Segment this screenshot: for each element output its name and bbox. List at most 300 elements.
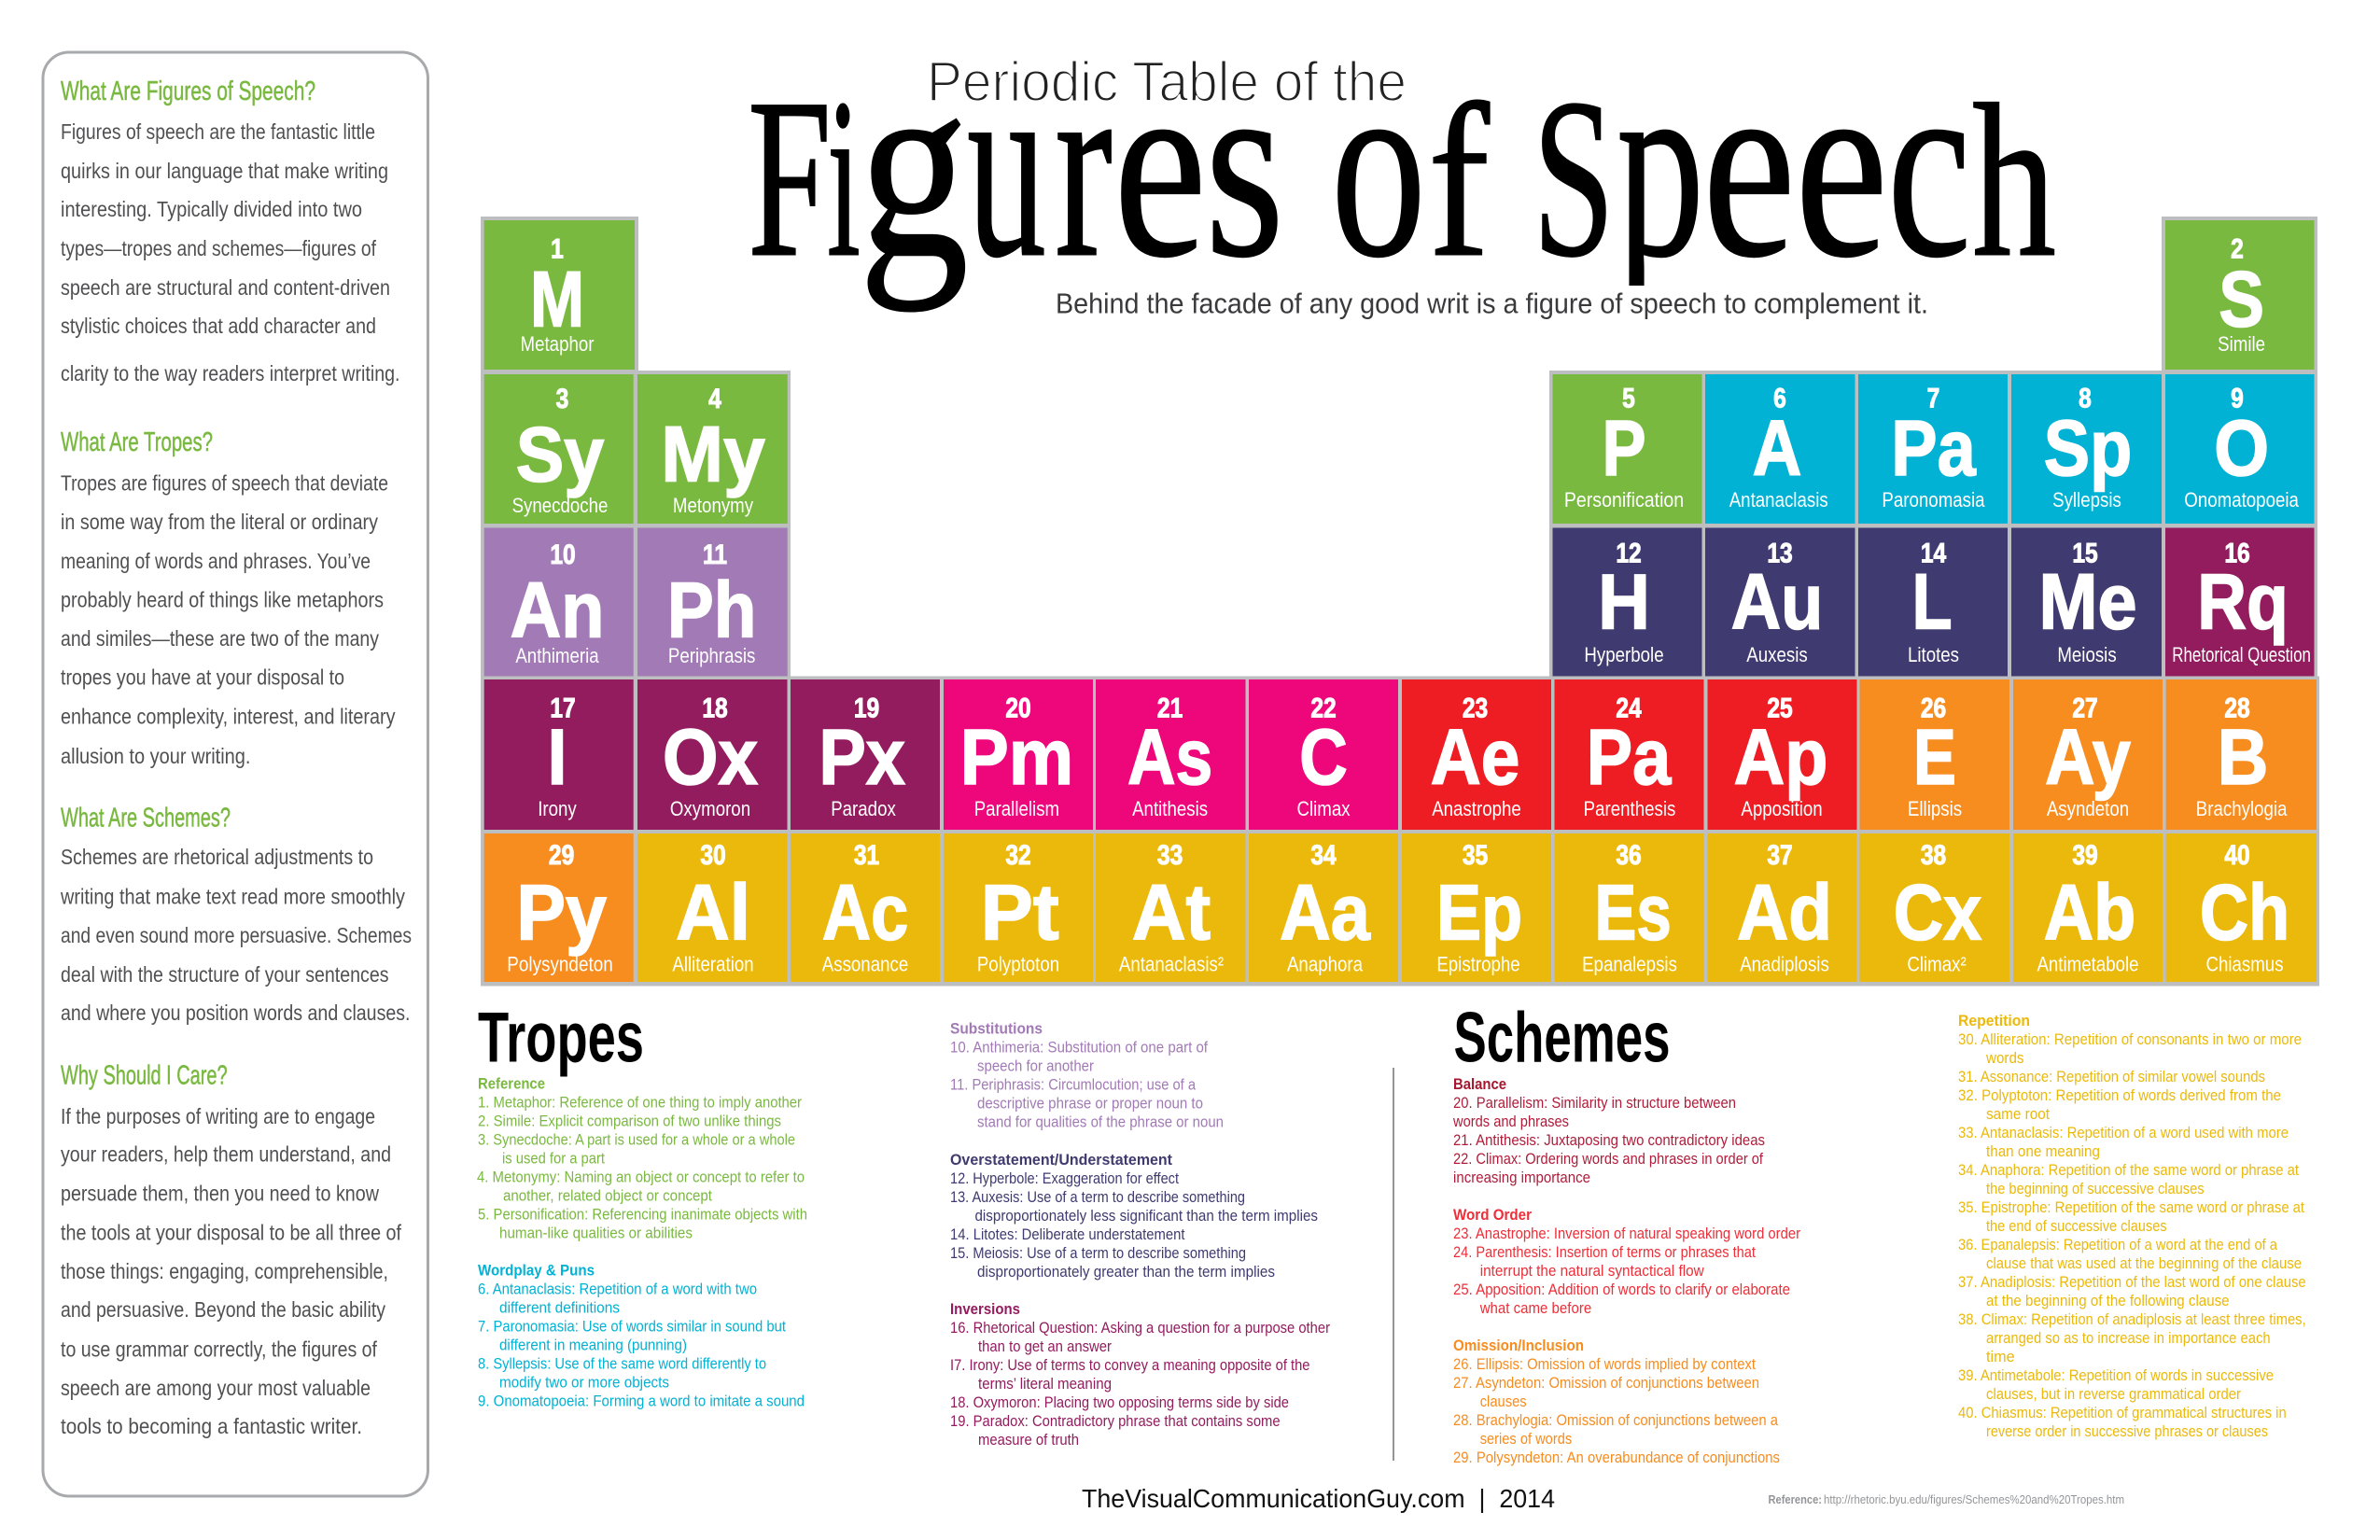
text block: tropes: probably heard of things like metaphors [61, 588, 384, 612]
legend: repetition [1958, 1013, 2306, 1440]
tile 20 Parallelism [944, 679, 1093, 830]
legend: word order: Word Order [1453, 1207, 1533, 1224]
legend: repetition: the beginning of successive clauses [1986, 1181, 2205, 1197]
tile 2 Simile [2165, 220, 2315, 370]
tile 38 Climax squared: Cx [1894, 868, 1981, 957]
tile 10 Anthimeria: An [511, 567, 604, 654]
tile 3 Synecdoche: Synecdoche [512, 496, 608, 517]
tile 2 Simile: S [2219, 256, 2264, 343]
legend: word order: 25. Apposition: Addition of words to clarify or elaborate [1453, 1281, 1790, 1298]
tile 34 Anaphora: 34 [1310, 839, 1337, 871]
title: Figures of Speech: u [967, 21, 1046, 313]
tile 8 Syllepsis [2011, 374, 2162, 524]
legend: wordplay and puns: different definitions [499, 1300, 620, 1317]
title: Figures of Speech: h [1972, 60, 2056, 302]
tile 19 Paradox [791, 679, 940, 830]
legend: overstatement and understatement: disproportionately less significant than the term implies [974, 1208, 1318, 1225]
tile 6 Antanaclasis: Antanaclasis [1729, 490, 1828, 511]
legend: omission and inclusion: 26. Ellipsis: Omission of words implied by context [1453, 1356, 1756, 1373]
tile 4 Metonymy [637, 374, 788, 524]
tile 39 Antimetabole: Ab [2044, 868, 2135, 957]
tile 21 Antithesis: As [1127, 712, 1212, 801]
tile 9 Onomatopoeia: 9 [2231, 382, 2244, 413]
tile 21 Antithesis: Antithesis [1132, 799, 1208, 820]
legend: balance [1452, 1076, 1765, 1186]
tile 32 Polyptoton: Polyptoton [977, 954, 1059, 976]
text block: tropes: allusion to your writing. [61, 744, 250, 768]
legend: overstatement and understatement: 12. Hyperbole: Exaggeration for effect [950, 1170, 1179, 1187]
text block: figures of speech: interesting. Typically divided into two [61, 197, 362, 221]
tile 33 Antanaclasis squared: At [1132, 870, 1211, 957]
tile 11 Periphrasis: Ph [667, 567, 756, 654]
text block: figures of speech: types—tropes and schemes—figures of [61, 236, 377, 260]
tile 3 Synecdoche: Sy [516, 412, 604, 498]
tile 1 Metaphor [484, 220, 635, 370]
text block: why care: and persuasive. Beyond the basic ability [61, 1297, 385, 1322]
tile 29 Polysyndeton: Py [516, 869, 607, 957]
title: Periodic Table of the: Periodic Table of the [927, 50, 1407, 113]
tile 23 Anastrophe: Ae [1431, 713, 1519, 801]
tile 3 Synecdoche: 3 [556, 383, 568, 414]
legend: reference tropes: is used for a part [502, 1151, 605, 1168]
legend: reference tropes: 3. Synecdoche: A part is used for a whole or a whole [478, 1132, 795, 1149]
text block: tropes [61, 470, 396, 768]
legend: repetition: 36. Epanalepsis: Repetition of a word at the end of a [1958, 1237, 2278, 1253]
legend: repetition: the end of successive clauses [1986, 1218, 2167, 1235]
tile 18 Oxymoron [637, 679, 788, 830]
tile 34 Anaphora [1249, 833, 1398, 982]
tile 30 Alliteration [637, 833, 788, 982]
legend: repetition: 37. Anadiplosis: Repetition of the last word of one clause [1958, 1274, 2306, 1291]
tile 15 Meiosis: Me [2038, 558, 2137, 646]
tile 13 Auxesis [1705, 528, 1855, 676]
heading: what are schemes: What Are Schemes? [61, 804, 231, 833]
legend: inversions: 16. Rhetorical Question: Asking a question for a purpose other [950, 1320, 1330, 1337]
tile 13 Auxesis: 13 [1767, 537, 1793, 568]
legend: repetition: clause that was used at the beginning of the clause [1986, 1255, 2302, 1272]
legend: overstatement and understatement: 14. Litotes: Deliberate understatement [950, 1226, 1185, 1243]
legend: substitutions: speech for another [977, 1057, 1094, 1074]
tile 28 Brachylogia: B [2218, 713, 2268, 801]
title: Figures of Speech: S [1533, 52, 1615, 304]
text block: why care: those things: engaging, comprehensible, [61, 1259, 388, 1283]
tile 16 Rhetorical Question [2165, 528, 2315, 676]
tile 15 Meiosis: 15 [2072, 537, 2098, 568]
periodic table [481, 217, 2319, 986]
tile 39 Antimetabole: Antimetabole [2037, 954, 2139, 976]
tile 24 Parenthesis [1555, 679, 1704, 830]
text block: figures of speech: stylistic choices that add character and [61, 314, 376, 338]
legend: inversions: terms’ literal meaning [978, 1376, 1112, 1393]
tile 18 Oxymoron: 18 [702, 692, 728, 723]
tile 7 Paronomasia: 7 [1927, 382, 1939, 413]
title: Figures of Speech: c [1887, 21, 1971, 313]
legend: omission and inclusion: Omission/Inclusion [1453, 1337, 1584, 1354]
tile 14 Litotes: L [1911, 559, 1953, 646]
tile 12 Hyperbole: Hyperbole [1584, 645, 1664, 666]
tile 37 Anadiplosis: Ad [1737, 869, 1832, 958]
tile 5 Personification: P [1602, 405, 1646, 492]
legend: repetition: 30. Alliteration: Repetition of consonants in two or more [1958, 1031, 2302, 1048]
text block: why care [61, 1104, 402, 1438]
text block: why care: tools to becoming a fantastic writer. [61, 1414, 362, 1438]
tile 12 Hyperbole: 12 [1616, 537, 1642, 568]
legend: omission and inclusion: 28. Brachylogia: Omission of conjunctions between a [1453, 1412, 1779, 1429]
tile 36 Epanalepsis [1555, 833, 1704, 982]
text block: schemes: writing that make text read more smoothly [60, 885, 405, 909]
legend: reference tropes: human-like qualities or abilities [499, 1225, 693, 1242]
legend: repetition: 38. Climax: Repetition of anadiplosis at least three times, [1958, 1311, 2306, 1328]
text block: tropes: meaning of words and phrases. You’ve [61, 549, 371, 573]
legend: repetition: arranged so as to increase in importance each [1986, 1330, 2271, 1347]
tile 8 Syllepsis: 8 [2079, 382, 2092, 413]
tile 35 Epistrophe [1402, 833, 1551, 982]
legend: substitutions: stand for qualities of the phrase or noun [977, 1113, 1224, 1130]
tile 35 Epistrophe: 35 [1463, 839, 1488, 871]
legend: overstatement and understatement: disproportionately greater than the term implies [977, 1264, 1275, 1281]
text block: schemes: Schemes are rhetorical adjustments to [61, 845, 373, 869]
tile 25 Apposition: 25 [1767, 692, 1793, 723]
tile 17 Irony: I [547, 713, 567, 801]
legend: repetition: 39. Antimetabole: Repetition of words in successive [1958, 1367, 2274, 1384]
legend: omission and inclusion: 27. Asyndeton: Omission of conjunctions between [1453, 1375, 1759, 1392]
tile 32 Polyptoton: Pt [981, 869, 1059, 957]
legend: wordplay and puns: 6. Antanaclasis: Repetition of a word with two [478, 1281, 757, 1298]
legend: reference tropes: 4. Metonymy: Naming an object or concept to refer to [477, 1169, 805, 1186]
heading: what are figures of speech: What Are Figures of Speech? [61, 77, 315, 106]
legend: repetition: reverse order in successive phrases or clauses [1986, 1423, 2268, 1440]
tile 15 Meiosis: Meiosis [2057, 645, 2117, 666]
title: Figures of Speech: o [1331, 21, 1426, 313]
tile 30 Alliteration: Al [676, 870, 750, 957]
legend: balance: words and phrases [1452, 1113, 1569, 1130]
tile 31 Assonance [791, 833, 940, 982]
legend: inversions: than to get an answer [978, 1338, 1112, 1355]
tile 39 Antimetabole: 39 [2072, 839, 2098, 871]
tile 40 Chiasmus: Ch [2200, 869, 2289, 957]
tile 11 Periphrasis: 11 [703, 539, 727, 570]
legend: wordplay and puns: 8. Syllepsis: Use of the same word differently to [478, 1356, 766, 1373]
tile 36 Epanalepsis: Epanalepsis [1582, 954, 1677, 976]
legend: word order: 24. Parenthesis: Insertion of terms or phrases that [1453, 1244, 1756, 1261]
tile 12 Hyperbole [1553, 528, 1702, 676]
title: Figures of Speech: e [1702, 21, 1796, 313]
tile 17 Irony: Irony [538, 799, 578, 820]
tile 22 Climax: Climax [1296, 799, 1351, 820]
tile 25 Apposition: Ap [1734, 713, 1827, 801]
tile 21 Antithesis [1096, 679, 1245, 830]
tile 25 Apposition: Apposition [1741, 799, 1823, 820]
tile 2 Simile: Simile [2218, 334, 2265, 356]
tile 24 Parenthesis: Pa [1587, 713, 1672, 801]
tile 1 Metaphor: M [530, 256, 584, 343]
text block: why care: persuade them, then you need to know [61, 1182, 379, 1206]
legend: reference tropes: another, related object or concept [503, 1188, 712, 1205]
tile 37 Anadiplosis: 37 [1767, 839, 1793, 871]
legend: repetition: 35. Epistrophe: Repetition of the same word or phrase at [1958, 1199, 2304, 1216]
tile 8 Syllepsis: Sp [2044, 404, 2132, 492]
text block: schemes: deal with the structure of your sentences [61, 962, 388, 987]
tile 6 Antanaclasis: A [1753, 404, 1801, 492]
tile 23 Anastrophe: 23 [1463, 692, 1488, 723]
tile 4 Metonymy: Metonymy [673, 496, 754, 517]
legend: overstatement and understatement: 13. Auxesis: Use of a term to describe something [950, 1189, 1245, 1206]
legend: repetition: time [1986, 1349, 2015, 1365]
tile 11 Periphrasis [637, 528, 788, 676]
legend: repetition: 33. Antanaclasis: Repetition of a word used with more [1958, 1125, 2289, 1141]
subtitle: Behind the facade of any good writ is a figure of speech to complement it. [1056, 287, 1928, 320]
legend: wordplay and puns: 7. Paronomasia: Use of words similar in sound but [478, 1319, 786, 1336]
text block: tropes: Tropes are figures of speech that deviate [61, 470, 388, 495]
legend: overstatement and understatement: 15. Meiosis: Use of a term to describe something [950, 1245, 1246, 1262]
tile 20 Parallelism: Parallelism [974, 799, 1059, 820]
tile 26 Ellipsis: E [1913, 714, 1956, 802]
tile 29 Polysyndeton: Polysyndeton [507, 953, 613, 976]
tile 38 Climax squared: Climax² [1907, 954, 1967, 976]
legend: word order: what came before [1479, 1300, 1591, 1317]
heading: why should I care: Why Should I Care? [61, 1060, 228, 1090]
legend: repetition: 34. Anaphora: Repetition of the same word or phrase at [1958, 1162, 2299, 1179]
legend: inversions: 18. Oxymoron: Placing two opposing terms side by side [950, 1394, 1289, 1411]
heading: Tropes: Tropes [478, 999, 644, 1078]
text block: tropes: and similes—these are two of the many [61, 626, 379, 651]
tile 27 Asyndeton: Ay [2045, 713, 2131, 801]
tile 16 Rhetorical Question: 16 [2224, 537, 2250, 568]
legend: word order: interrupt the natural syntactical flow [1480, 1263, 1704, 1280]
title: Figures of Speech: r [1055, 21, 1113, 313]
legend: balance: 20. Parallelism: Similarity in structure between [1453, 1095, 1736, 1112]
legend: inversions: I7. Irony: Use of terms to convey a meaning opposite of the [950, 1357, 1310, 1374]
text block: why care: speech are among your most valuable [61, 1376, 371, 1400]
tile 10 Anthimeria [484, 528, 634, 676]
title: Figures of Speech: s [1205, 21, 1284, 313]
tile 27 Asyndeton: Asyndeton [2047, 799, 2129, 820]
tile 5 Personification [1553, 374, 1702, 524]
tile 10 Anthimeria: Anthimeria [515, 646, 599, 667]
tile 28 Brachylogia: 28 [2224, 692, 2250, 723]
tile 35 Epistrophe: Epistrophe [1436, 954, 1520, 976]
legend: word order: 23. Anastrophe: Inversion of natural speaking word order [1453, 1225, 1800, 1242]
tile 2 Simile: 2 [2231, 232, 2244, 264]
tile 17 Irony: 17 [550, 692, 576, 723]
tile 28 Brachylogia [2166, 679, 2317, 830]
tile 31 Assonance: Ac [822, 869, 908, 957]
tile 39 Antimetabole [2013, 833, 2163, 982]
tile 29 Polysyndeton: 29 [549, 839, 574, 871]
text block: tropes: in some way from the literal or ordinary [61, 510, 378, 534]
legend: wordplay and puns: Wordplay & Puns [478, 1263, 595, 1280]
tile 40 Chiasmus: Chiasmus [2205, 954, 2284, 976]
text block: tropes: enhance complexity, interest, and literary [61, 704, 396, 728]
tile 17 Irony [484, 679, 634, 830]
title: Figures of Speech: g [859, 21, 969, 313]
tile 40 Chiasmus: 40 [2224, 839, 2250, 871]
tile 19 Paradox: Paradox [831, 799, 896, 820]
heading: what are tropes: What Are Tropes? [61, 427, 213, 457]
legend: inversions: Inversions [950, 1301, 1020, 1318]
tile 4 Metonymy: My [661, 412, 765, 498]
tile 30 Alliteration: Alliteration [672, 954, 754, 976]
tile 38 Climax squared [1859, 833, 2009, 982]
tile 21 Antithesis: 21 [1157, 692, 1183, 723]
text block: why care: your readers, help them understand, and [61, 1142, 391, 1167]
tile 24 Parenthesis: Parenthesis [1584, 799, 1675, 820]
tile 7 Paronomasia [1858, 374, 2008, 524]
tile 27 Asyndeton: 27 [2072, 692, 2098, 723]
tile 28 Brachylogia: Brachylogia [2196, 799, 2288, 820]
legend: inversions: 19. Paradox: Contradictory phrase that contains some [950, 1413, 1281, 1430]
text block: why care: the tools at your disposal to be all three of [61, 1221, 402, 1245]
tile 6 Antanaclasis: 6 [1773, 382, 1786, 413]
legend: repetition: same root [1986, 1106, 2050, 1123]
legend: wordplay and puns: different in meaning (punning) [499, 1337, 687, 1354]
legend: repetition: words [1985, 1050, 2023, 1067]
legend: omission and inclusion: series of words [1480, 1431, 1572, 1448]
heading: Schemes: Schemes [1454, 999, 1671, 1078]
reference citation: Reference: [1768, 1493, 1822, 1506]
legend: substitutions: descriptive phrase or proper noun to [977, 1095, 1203, 1112]
legend: repetition: 40. Chiasmus: Repetition of grammatical structures in [1958, 1405, 2287, 1421]
tile 30 Alliteration: 30 [700, 839, 726, 871]
tile 32 Polyptoton [944, 833, 1093, 982]
tile 10 Anthimeria: 10 [550, 539, 576, 570]
title: Figures of Speech: i [827, 52, 861, 304]
tile 14 Litotes: Litotes [1908, 645, 1959, 666]
tile 7 Paronomasia: Paronomasia [1882, 490, 1985, 511]
legend: substitutions [950, 1020, 1224, 1130]
tile 16 Rhetorical Question: Rq [2197, 558, 2289, 646]
reference citation: http://rhetoric.byu.edu/figures/Schemes%20and%20Tropes.htm [1824, 1493, 2124, 1506]
text block: figures of speech: clarity to the way readers interpret writing. [61, 361, 399, 385]
legend: inversions: measure of truth [978, 1432, 1079, 1449]
text block: schemes: and where you position words and clauses. [61, 1001, 411, 1025]
tile 26 Ellipsis: Ellipsis [1908, 799, 1962, 820]
legend: wordplay and puns: modify two or more objects [499, 1375, 669, 1392]
legend: substitutions: Substitutions [950, 1020, 1043, 1037]
tile 14 Litotes: 14 [1921, 537, 1947, 568]
legend: repetition: clauses, but in reverse grammatical order [1986, 1386, 2241, 1403]
tile 19 Paradox: Px [819, 713, 905, 801]
title: Figures of Speech: p [1617, 21, 1704, 313]
tile 22 Climax: C [1299, 712, 1348, 801]
legend: repetition: at the beginning of the following clause [1986, 1293, 2230, 1309]
tile 31 Assonance: Assonance [822, 954, 908, 976]
tile 29 Polysyndeton [484, 833, 634, 982]
tile 18 Oxymoron: Ox [663, 714, 758, 802]
panel: intro sidebar [43, 52, 427, 1496]
title: Figures of Speech: e [1113, 21, 1207, 313]
tile 35 Epistrophe: Ep [1436, 869, 1522, 957]
tile 4 Metonymy: 4 [708, 383, 722, 414]
tile 20 Parallelism: Pm [960, 714, 1073, 802]
tile 20 Parallelism: 20 [1005, 692, 1031, 723]
legend: balance: Balance [1453, 1076, 1506, 1093]
tile 3 Synecdoche [484, 374, 634, 524]
tile 26 Ellipsis: 26 [1921, 692, 1946, 723]
text block: schemes: and even sound more persuasive. Schemes [61, 923, 412, 947]
tile 25 Apposition [1708, 679, 1857, 830]
tile 13 Auxesis: Au [1731, 557, 1823, 646]
tile 23 Anastrophe [1402, 679, 1551, 830]
legend: omission and inclusion [1453, 1337, 1780, 1466]
tile 37 Anadiplosis [1708, 833, 1857, 982]
legend: substitutions: 10. Anthimeria: Substitution of one part of [950, 1039, 1208, 1056]
tile 5 Personification: Personification [1564, 489, 1684, 511]
tile 36 Epanalepsis: Es [1595, 870, 1672, 957]
text block: schemes [60, 845, 412, 1025]
tile 33 Antanaclasis squared: Antanaclasis² [1119, 954, 1224, 976]
legend: inversions [950, 1301, 1330, 1449]
text block: figures of speech [61, 119, 399, 385]
tile 34 Anaphora: Anaphora [1287, 954, 1364, 976]
text block: figures of speech: quirks in our language that make writing [61, 159, 388, 183]
legend: omission and inclusion: clauses [1480, 1393, 1527, 1410]
tile 37 Anadiplosis: Anadiplosis [1740, 954, 1829, 976]
tile 8 Syllepsis: Syllepsis [2052, 490, 2121, 511]
tile 18 Oxymoron: Oxymoron [670, 799, 750, 820]
tile 9 Onomatopoeia: Onomatopoeia [2184, 490, 2299, 511]
footer credit: TheVisualCommunicationGuy.com | 2014 [1082, 1484, 1555, 1513]
tile 33 Antanaclasis squared [1096, 833, 1245, 982]
text block: why care: to use grammar correctly, the figures of [61, 1337, 378, 1362]
tile 1 Metaphor: Metaphor [521, 334, 595, 356]
tile 32 Polyptoton: 32 [1005, 839, 1031, 871]
legend: reference tropes: 1. Metaphor: Reference of one thing to imply another [478, 1095, 802, 1112]
tile 9 Onomatopoeia [2165, 374, 2315, 524]
tile 16 Rhetorical Question: Rhetorical Question [2172, 644, 2311, 667]
legend: wordplay and puns [478, 1263, 805, 1410]
tile 14 Litotes [1858, 528, 2008, 676]
legend: reference tropes: 5. Personification: Referencing inanimate objects with [478, 1207, 807, 1224]
legend: repetition: than one meaning [1986, 1143, 2100, 1160]
tile 31 Assonance: 31 [854, 839, 879, 871]
tile 5 Personification: 5 [1622, 382, 1635, 413]
legend: balance: increasing importance [1453, 1169, 1590, 1186]
tile 6 Antanaclasis [1705, 374, 1855, 524]
tile 33 Antanaclasis squared: 33 [1157, 839, 1183, 871]
tile 24 Parenthesis: 24 [1616, 692, 1642, 723]
title: Figures of Speech: F [748, 52, 832, 304]
tile 11 Periphrasis: Periphrasis [668, 646, 755, 667]
legend: balance: 22. Climax: Ordering words and phrases in order of [1453, 1151, 1763, 1168]
legend: overstatement and understatement: Overstatement/Understatement [950, 1152, 1172, 1169]
text block: tropes: tropes you have at your disposal to [61, 665, 344, 690]
tile 19 Paradox: 19 [854, 692, 879, 723]
tile 13 Auxesis: Auxesis [1746, 645, 1808, 666]
text block: figures of speech: speech are structural and content-driven [61, 275, 390, 300]
tile 22 Climax: 22 [1310, 692, 1337, 723]
tile 36 Epanalepsis: 36 [1616, 839, 1642, 871]
tile 9 Onomatopoeia: O [2214, 404, 2269, 492]
legend: substitutions: 11. Periphrasis: Circumlocution; use of a [950, 1076, 1197, 1093]
legend: reference tropes: Reference [478, 1076, 545, 1093]
legend: repetition: 32. Polyptoton: Repetition of words derived from the [1958, 1087, 2281, 1104]
tile 23 Anastrophe: Anastrophe [1432, 799, 1521, 820]
tile 15 Meiosis [2011, 528, 2162, 676]
text block: figures of speech: Figures of speech are the fantastic little [61, 119, 375, 144]
legend: overstatement and understatement [950, 1152, 1318, 1281]
text block: why care: If the purposes of writing are to engage [61, 1104, 375, 1128]
legend: word order [1453, 1207, 1800, 1317]
title: Figures of Speech: f [1428, 60, 1491, 302]
title: Figures of Speech: e [1795, 21, 1888, 313]
tile 22 Climax [1249, 679, 1398, 830]
legend: repetition: Repetition [1958, 1013, 2030, 1029]
legend: omission and inclusion: 29. Polysyndeton: An overabundance of conjunctions [1453, 1449, 1780, 1466]
legend: reference tropes: 2. Simile: Explicit comparison of two unlike things [478, 1113, 781, 1130]
tile 27 Asyndeton [2013, 679, 2163, 830]
legend: wordplay and puns: 9. Onomatopoeia: Forming a word to imitate a sound [478, 1393, 805, 1410]
